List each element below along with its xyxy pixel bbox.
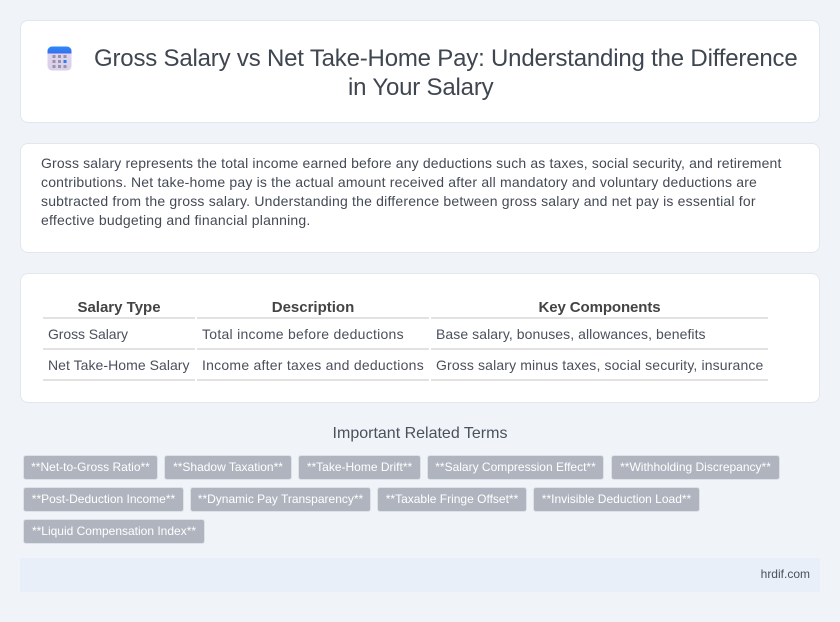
tag: **Post-Deduction Income** <box>32 492 175 506</box>
title: in Your Salary <box>348 74 493 101</box>
table header: Key Components: Key Components <box>539 299 660 316</box>
tag <box>23 519 205 544</box>
summary text: effective budgeting and financial planning. <box>41 212 311 228</box>
tag <box>298 455 421 480</box>
tag: **Take-Home Drift** <box>307 460 412 474</box>
tag <box>611 455 780 480</box>
tag group: related terms <box>23 455 780 544</box>
table header: Description: Description <box>272 299 354 316</box>
tag: **Invisible Deduction Load** <box>542 492 691 506</box>
header card <box>20 20 820 123</box>
row: Net components: Gross salary minus taxes, social security, insurance <box>436 357 763 373</box>
tag: **Liquid Compensation Index** <box>32 524 196 538</box>
icon: calendar <box>48 46 72 70</box>
summary text: subtracted from the gross salary. Understanding the difference between gross salary and net pay is essential for <box>41 193 756 209</box>
tag <box>23 487 184 512</box>
footer source: hrdif.com <box>761 567 810 581</box>
summary text <box>41 155 782 228</box>
related terms heading: Important Related Terms <box>333 425 507 442</box>
table header: Salary Type: Salary Type <box>77 299 161 316</box>
tag <box>427 455 604 480</box>
row: Gross Salary components: Base salary, bonuses, allowances, benefits <box>436 326 706 342</box>
tag: **Net-to-Gross Ratio** <box>31 460 150 474</box>
row: Gross Salary type: Gross Salary <box>48 326 128 342</box>
row: Net type: Net Take-Home Salary <box>48 357 190 373</box>
tag: **Salary Compression Effect** <box>435 460 596 474</box>
row: Gross Salary description: Total income before deductions <box>202 326 404 342</box>
tag <box>190 487 371 512</box>
tag: **Taxable Fringe Offset** <box>386 492 518 506</box>
tag: **Dynamic Pay Transparency** <box>198 492 363 506</box>
tag <box>164 455 292 480</box>
row: Net description: Income after taxes and deductions <box>202 357 424 373</box>
tag: **Shadow Taxation** <box>173 460 283 474</box>
title: Gross Salary vs Net Take-Home Pay: Understanding the Difference <box>94 45 797 72</box>
summary text: Gross salary represents the total income earned before any deductions such as taxes, social security, and retirement <box>41 155 782 171</box>
summary text: contributions. Net take-home pay is the actual amount received after all mandatory and voluntary deductions are <box>41 174 757 190</box>
tag: **Withholding Discrepancy** <box>620 460 771 474</box>
tag <box>23 455 158 480</box>
title <box>94 45 797 101</box>
panel: comparison table <box>20 273 820 403</box>
footer bar <box>20 558 820 592</box>
tag <box>377 487 527 512</box>
panel: summary <box>20 143 820 253</box>
tag <box>533 487 700 512</box>
